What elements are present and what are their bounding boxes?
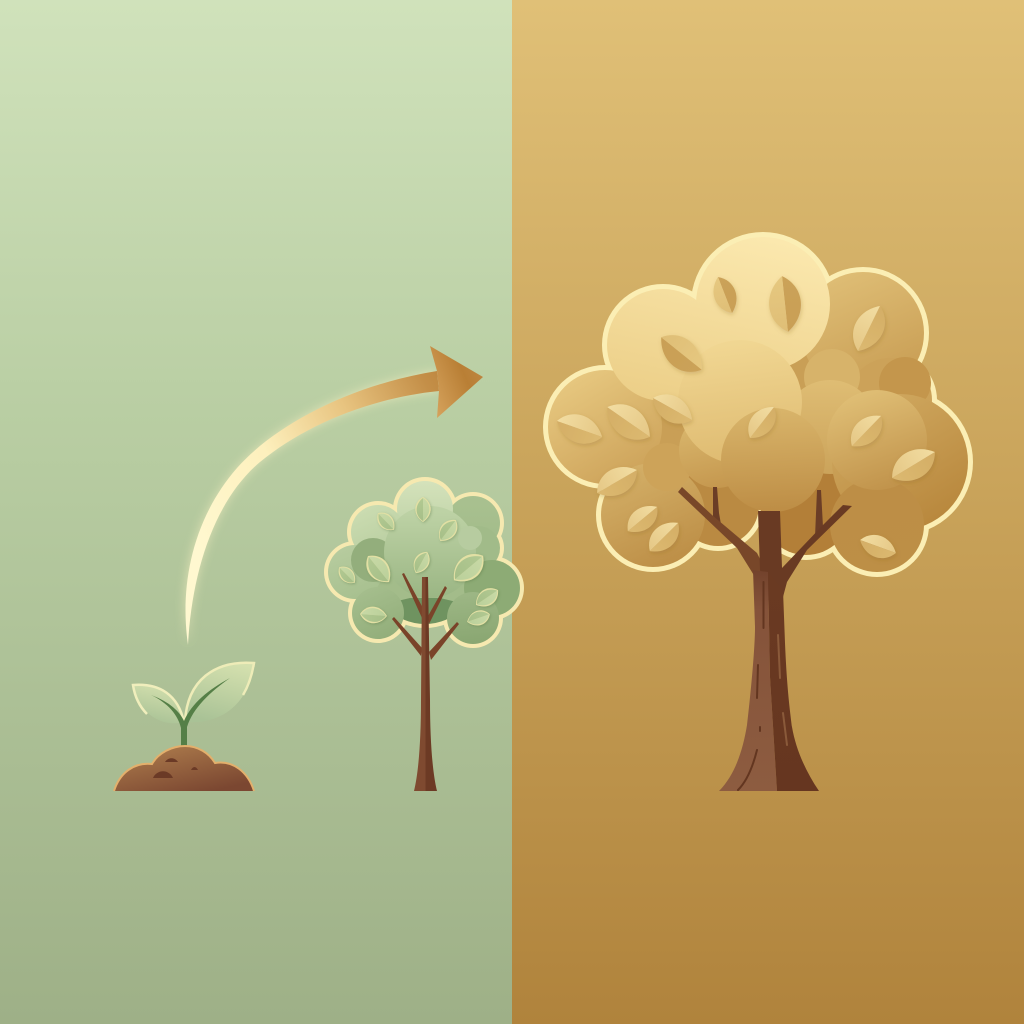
- panel: golden background: [512, 0, 1024, 1024]
- mature tree crown: [543, 232, 973, 577]
- icon: mature golden tree: [543, 232, 973, 791]
- icon: sprout in soil: [114, 663, 254, 791]
- soil holes: [153, 758, 198, 778]
- panel: green background: [0, 0, 512, 1024]
- sprout stem: [151, 678, 230, 746]
- mature tree trunk and branches: [678, 487, 852, 791]
- arrow: curved growth arrow: [185, 346, 483, 645]
- soil mound: [114, 746, 254, 791]
- young tree trunk and branches: [392, 573, 459, 791]
- sprout right leaf: [185, 663, 254, 722]
- young tree crown: [324, 477, 524, 648]
- icon: young green tree: [324, 477, 524, 791]
- sprout left leaf: [133, 685, 184, 723]
